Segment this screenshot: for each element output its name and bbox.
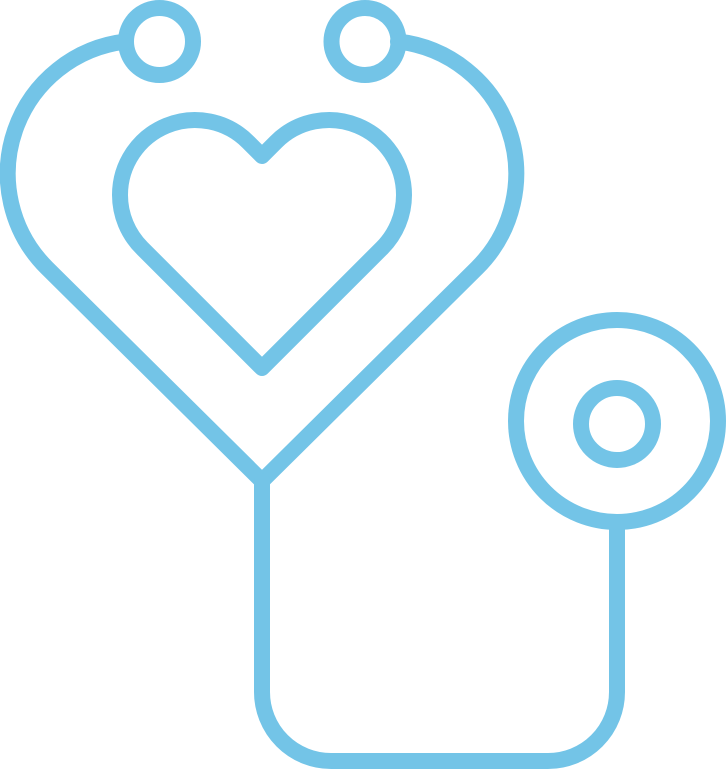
chest piece outer ring <box>516 320 718 522</box>
tube to chest piece <box>262 481 617 761</box>
inner heart <box>120 120 404 368</box>
left ear tip <box>126 8 193 75</box>
right ear tip <box>332 8 398 75</box>
tubing: heart-shaped headset <box>8 42 516 481</box>
chest piece inner ring <box>581 388 653 460</box>
